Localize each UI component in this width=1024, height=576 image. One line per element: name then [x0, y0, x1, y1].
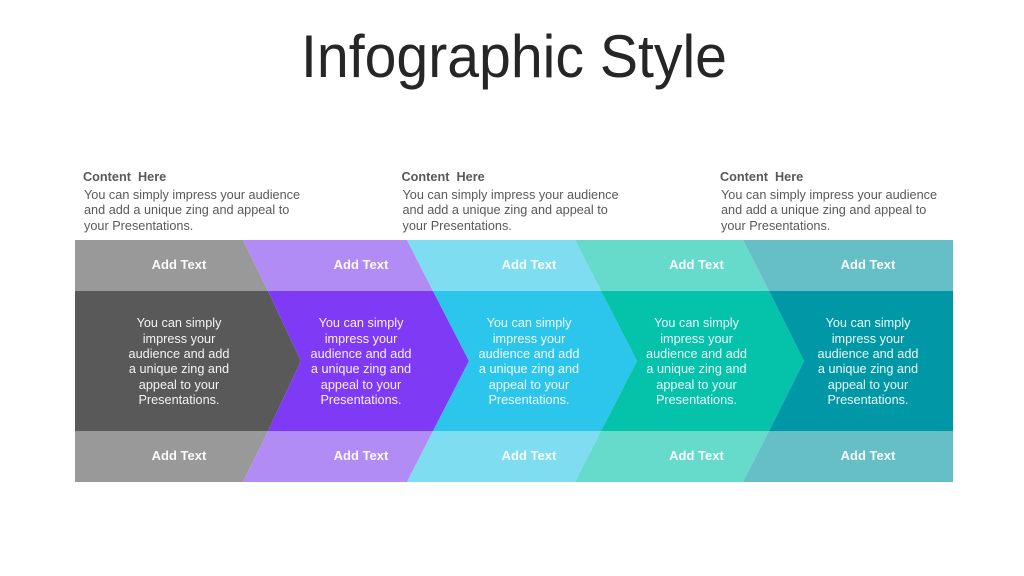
panel: teal section: appeal to your [828, 378, 909, 392]
panel: cyan chevron: Presentations. [488, 393, 570, 407]
panel: teal section: impress your [832, 332, 905, 346]
title: Infographic Style [301, 23, 727, 90]
panel: purple chevron: You can simply [319, 316, 404, 330]
panel: gray chevron: Add Text [152, 257, 207, 272]
text block: content 1: You can simply impress your audience [84, 188, 300, 202]
panel: cyan chevron [407, 240, 637, 482]
panel: cyan chevron: a unique zing and [479, 362, 579, 376]
panel: gray chevron: impress your [143, 332, 216, 346]
panel: purple chevron: Add Text [334, 257, 389, 272]
panel: purple chevron: Presentations. [320, 393, 402, 407]
text block: content 2: your Presentations. [402, 219, 512, 233]
panel: gray chevron: a unique zing and [129, 362, 229, 376]
panel: teal section: Add Text [841, 257, 896, 272]
panel: teal section: Add Text [841, 448, 896, 463]
panel: gray chevron: You can simply [137, 316, 222, 330]
text block: content 1: Content Here [83, 170, 166, 184]
panel: green chevron: a unique zing and [646, 362, 747, 376]
panel: purple chevron: audience and add [311, 347, 411, 361]
panel: gray chevron: audience and add [129, 347, 229, 361]
panel: teal section [743, 240, 953, 482]
panel: green chevron: audience and add [646, 347, 747, 361]
text block: content 2: You can simply impress your audience [402, 188, 619, 202]
panel: purple chevron: impress your [325, 332, 398, 346]
panel: green chevron: appeal to your [656, 378, 737, 392]
panel: green chevron: Presentations. [656, 393, 737, 407]
panel: teal section: audience and add [818, 347, 918, 361]
panel: cyan chevron: Add Text [502, 448, 557, 463]
panel: cyan chevron: appeal to your [489, 378, 570, 392]
panel: green chevron: Add Text [669, 448, 724, 463]
panel: green chevron [575, 240, 804, 482]
panel: cyan chevron: impress your [493, 332, 566, 346]
text block: content 1: your Presentations. [84, 219, 193, 233]
panel: gray chevron: Presentations. [138, 393, 220, 407]
panel: teal section: a unique zing and [818, 362, 918, 376]
panel: green chevron: You can simply [654, 316, 740, 330]
text block: content 3: your Presentations. [721, 219, 830, 233]
panel: green chevron: Add Text [669, 257, 724, 272]
panel: purple chevron: a unique zing and [311, 362, 411, 376]
panel: gray chevron: appeal to your [139, 378, 220, 392]
text block: content 3: Content Here [720, 170, 803, 184]
panel: purple chevron [243, 240, 469, 482]
panel: purple chevron: appeal to your [321, 378, 402, 392]
panel: teal section: Presentations. [827, 393, 909, 407]
panel: purple chevron: Add Text [334, 448, 389, 463]
text block: content 3 [720, 170, 937, 233]
text block: content 1 [83, 170, 300, 233]
panel: gray chevron [75, 240, 301, 482]
panel: green chevron: impress your [660, 332, 734, 346]
text block: content 3: You can simply impress your audience [721, 188, 937, 202]
text block: content 3: and add a unique zing and appeal to [721, 203, 926, 217]
text block: content 2 [402, 170, 619, 233]
text block: content 2: and add a unique zing and appeal to [402, 203, 608, 217]
text block: content 2: Content Here [402, 170, 485, 184]
panel: gray chevron: Add Text [152, 448, 207, 463]
panel: cyan chevron: Add Text [502, 257, 557, 272]
panel: cyan chevron: audience and add [479, 347, 579, 361]
panel: teal section: You can simply [826, 316, 911, 330]
panel: cyan chevron: You can simply [487, 316, 572, 330]
text block: content 1: and add a unique zing and appeal to [84, 203, 289, 217]
